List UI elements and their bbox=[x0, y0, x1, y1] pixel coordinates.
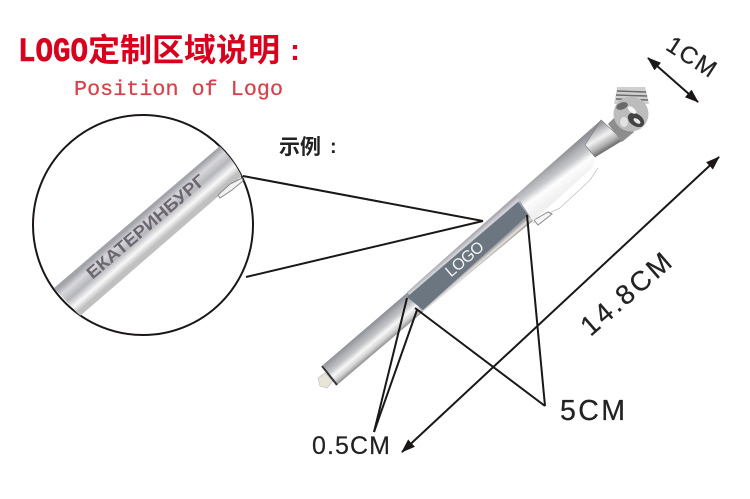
logo imprint area bbox=[407, 202, 528, 310]
5CM leader lines bbox=[415, 215, 545, 406]
0.5CM leader lines bbox=[374, 298, 417, 432]
arrow: head width dimension bbox=[648, 58, 698, 102]
infographic bbox=[20, 33, 720, 454]
label: 5CM: 5CM bbox=[560, 395, 625, 427]
magnified pen barrel bbox=[54, 146, 244, 316]
magnifier connector lines bbox=[243, 176, 483, 277]
pen clip bbox=[533, 168, 598, 225]
example label: 示例 bbox=[279, 136, 321, 159]
pen end cap bbox=[322, 366, 337, 385]
arrow: length dimension bbox=[402, 157, 719, 452]
title: LOGO bbox=[18, 32, 88, 72]
threaded nozzle bbox=[614, 87, 649, 104]
pen barrel upper section bbox=[516, 120, 601, 221]
subtitle: Position of Logo bbox=[74, 77, 283, 102]
chrome neck bbox=[608, 114, 634, 142]
pen barrel middle section bbox=[407, 194, 534, 312]
magnified pen clip bbox=[218, 178, 243, 198]
label: 1CM: 1CM bbox=[661, 31, 721, 83]
pen barrel lower section bbox=[323, 292, 424, 385]
example label: : bbox=[330, 136, 337, 158]
magnified logo text: ЕКАТЕРИНБУРГ bbox=[83, 171, 209, 283]
magnified pen circle bbox=[33, 115, 253, 335]
title bbox=[18, 32, 300, 72]
title: 定制区域说明 bbox=[88, 32, 280, 68]
label: 0.5CM: 0.5CM bbox=[312, 432, 390, 460]
chrome gauge head bbox=[614, 96, 648, 132]
title: : bbox=[290, 34, 300, 67]
label: 14.8CM: 14.8CM bbox=[574, 246, 677, 342]
logo imprint text: LOGO bbox=[442, 239, 488, 281]
pen tip bbox=[318, 373, 333, 388]
chrome collar bbox=[585, 120, 623, 157]
pen bbox=[318, 87, 649, 388]
